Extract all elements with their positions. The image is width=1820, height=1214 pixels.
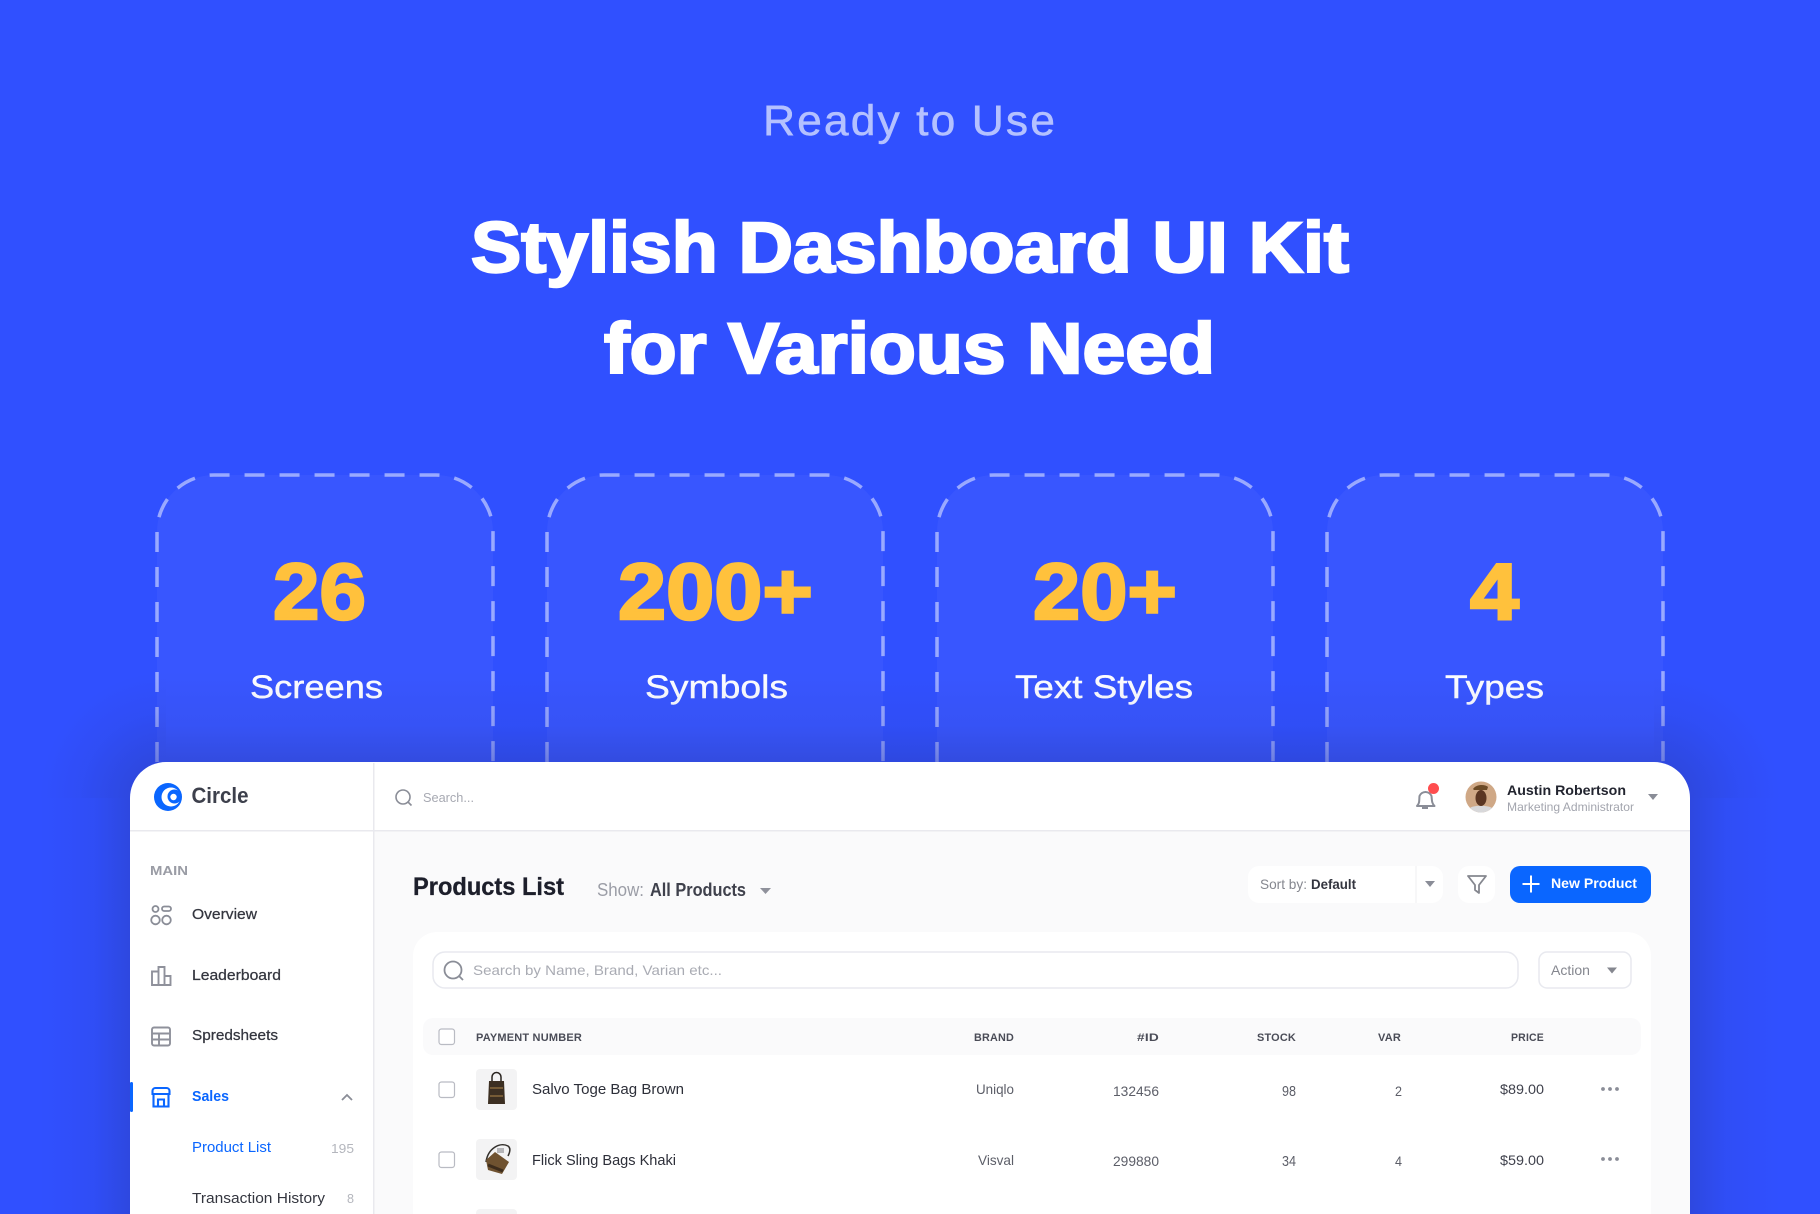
card: 26 Screens: 26 [273, 547, 366, 636]
action select: Action [1551, 962, 1590, 978]
top search [396, 790, 474, 806]
user avatar [1466, 782, 1496, 813]
card: 26 Screens: Screens [250, 669, 383, 705]
card: 20+ Text Styles: 20+ [1033, 547, 1177, 636]
top search: Search... [423, 790, 474, 805]
heading [471, 209, 1349, 389]
user name: Austin Robertson [1507, 782, 1626, 798]
sidebar navigation [130, 863, 354, 1207]
dashboard window [130, 762, 1690, 1214]
sort by select [1248, 866, 1443, 903]
card: 26 Screens [157, 475, 493, 762]
nav: Sales: Sales [192, 1089, 229, 1105]
table row: Flick Sling Bags Khaki: Flick Sling Bags Khaki [532, 1153, 676, 1169]
table header: VAR [1378, 1032, 1401, 1044]
table row: Flick Sling Bags Khaki: Visval [978, 1152, 1014, 1168]
table search box: Search by Name, Brand, Varian etc... [473, 962, 722, 978]
show filter: Show: [597, 880, 644, 900]
nav: Leaderboard: Leaderboard [192, 968, 281, 984]
nav: Spredsheets [152, 1028, 278, 1046]
new product button: New Product [1551, 875, 1637, 891]
card: 4 Types [1327, 475, 1663, 762]
heading: Stylish Dashboard UI Kit [471, 209, 1349, 288]
table row: Salvo Toge Bag Brown: Salvo Toge Bag Brown [532, 1082, 684, 1098]
show filter [597, 880, 771, 900]
table header: STOCK [1257, 1032, 1296, 1044]
table header: PRICE [1511, 1032, 1544, 1044]
table row: Flick Sling Bags Khaki: 4 [1395, 1153, 1402, 1169]
card: 4 Types: 4 [1470, 547, 1520, 636]
table header: #ID [1137, 1032, 1159, 1044]
card: 200+ Symbols: Symbols [645, 669, 788, 705]
nav: Leaderboard [152, 967, 281, 985]
sidebar navigation: MAIN [150, 863, 188, 878]
table row: Salvo Toge Bag Brown: 98 [1282, 1083, 1296, 1100]
nav: Sales [130, 1082, 352, 1112]
card: 20+ Text Styles [937, 475, 1273, 762]
eyebrow: Ready to Use: Ready to Use [763, 97, 1057, 145]
nav: Transaction History: Transaction History [192, 1191, 326, 1207]
table row: Salvo Toge Bag Brown: $89.00 [1500, 1081, 1544, 1097]
table search box [433, 952, 1518, 988]
nav: Transaction History: 8 [347, 1191, 354, 1206]
notification bell [1417, 783, 1439, 808]
nav: Product List: 195 [331, 1141, 354, 1156]
table header [423, 1018, 1641, 1055]
table header: BRAND [974, 1032, 1014, 1044]
table row: Salvo Toge Bag Brown: Uniqlo [976, 1081, 1014, 1097]
user name: Marketing Administrator [1507, 800, 1634, 814]
table row: Flick Sling Bags Khaki: 34 [1282, 1153, 1296, 1170]
new product button [1510, 866, 1651, 903]
card: 200+ Symbols: 200+ [618, 547, 813, 636]
sort by select: Sort by: [1260, 876, 1307, 892]
card: 20+ Text Styles: Text Styles [1015, 669, 1193, 705]
table row: Flick Sling Bags Khaki [439, 1139, 1619, 1180]
dashboard shadow [40, 672, 1780, 1214]
table row: Flick Sling Bags Khaki: $59.00 [1500, 1152, 1544, 1168]
show filter: All Products [650, 880, 746, 900]
table row: Flick Sling Bags Khaki: 299880 [1113, 1153, 1159, 1169]
table row: Salvo Toge Bag Brown: 2 [1395, 1083, 1402, 1099]
nav: Product List [192, 1140, 354, 1156]
sort by select: Default [1311, 876, 1356, 892]
logo: Circle: Circle [192, 783, 248, 808]
action select [1539, 952, 1631, 988]
table row 3 thumbnail [476, 1209, 517, 1214]
stat cards [157, 475, 1663, 762]
nav: Product List: Product List [192, 1140, 271, 1156]
nav: Spredsheets: Spredsheets [192, 1028, 278, 1044]
card: 4 Types: Types [1445, 669, 1544, 705]
products panel [413, 932, 1651, 1214]
filter button [1458, 866, 1495, 903]
heading: for Various Need [604, 310, 1215, 389]
logo: Circle [154, 783, 248, 811]
card: 200+ Symbols [547, 475, 883, 762]
nav: Overview [151, 906, 258, 924]
nav: Overview: Overview [192, 907, 258, 923]
table row: Salvo Toge Bag Brown: 132456 [1113, 1083, 1159, 1099]
user name [1507, 782, 1658, 814]
table row: Salvo Toge Bag Brown [439, 1069, 1619, 1110]
page title: Products List: Products List [413, 873, 565, 901]
table header: PAYMENT NUMBER [476, 1032, 582, 1044]
